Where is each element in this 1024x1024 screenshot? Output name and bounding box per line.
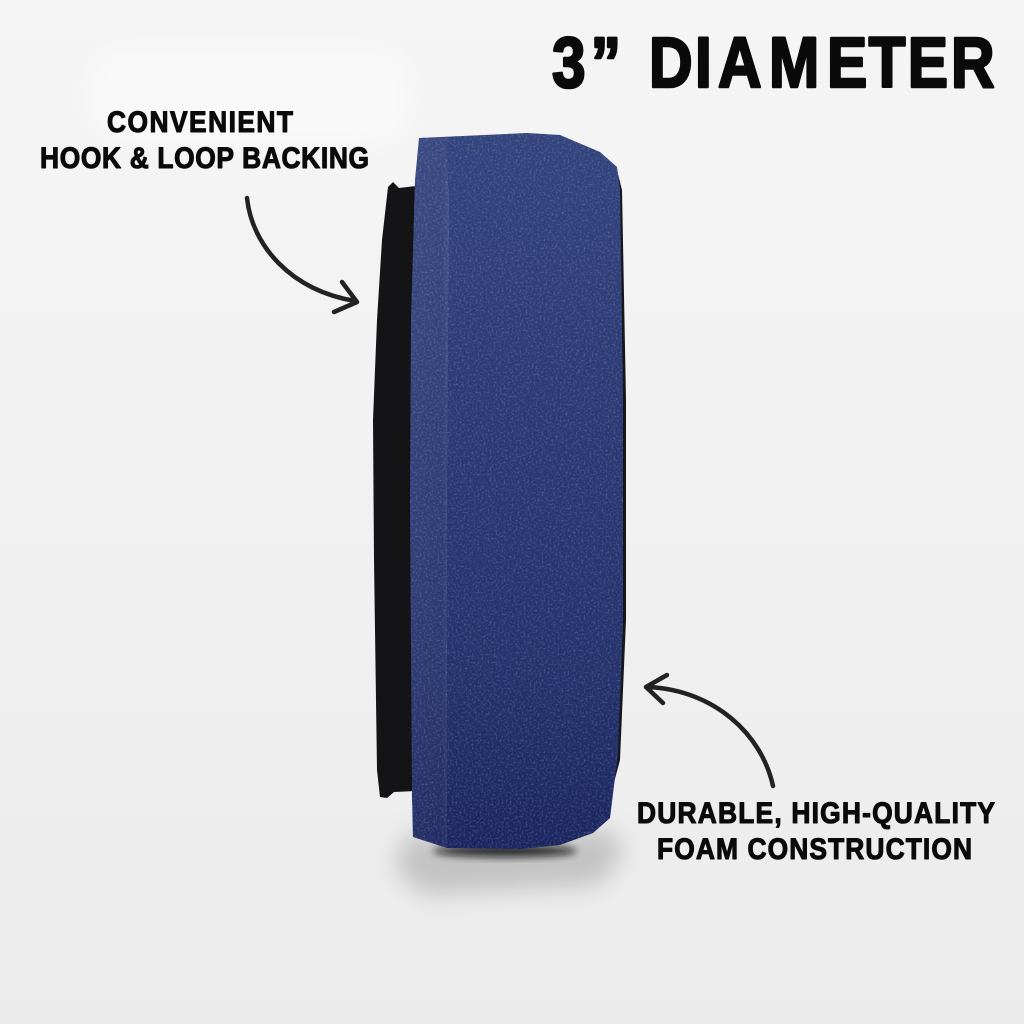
white patch behind label: [90, 50, 410, 145]
arrow: to foam: [646, 675, 773, 786]
label: hook and loop backing: HOOK & LOOP BACKING: [40, 140, 369, 174]
label: foam construction: DURABLE, HIGH-QUALITY: [637, 795, 995, 829]
black rim on right edge: [600, 170, 626, 790]
label: hook and loop backing: CONVENIENT: [107, 104, 293, 138]
foam bevel strip: [410, 137, 449, 848]
label: foam construction: [637, 795, 995, 865]
blue foam body: [410, 133, 623, 849]
product: foam pad: [373, 130, 630, 855]
label: hook and loop backing: [40, 104, 369, 174]
title: 3” DIAMETER: [552, 22, 995, 102]
hook and loop backing: [373, 182, 416, 798]
label: foam construction: FOAM CONSTRUCTION: [657, 831, 972, 865]
arrow: to backing: [247, 198, 357, 312]
shadow under pad: [395, 830, 625, 895]
